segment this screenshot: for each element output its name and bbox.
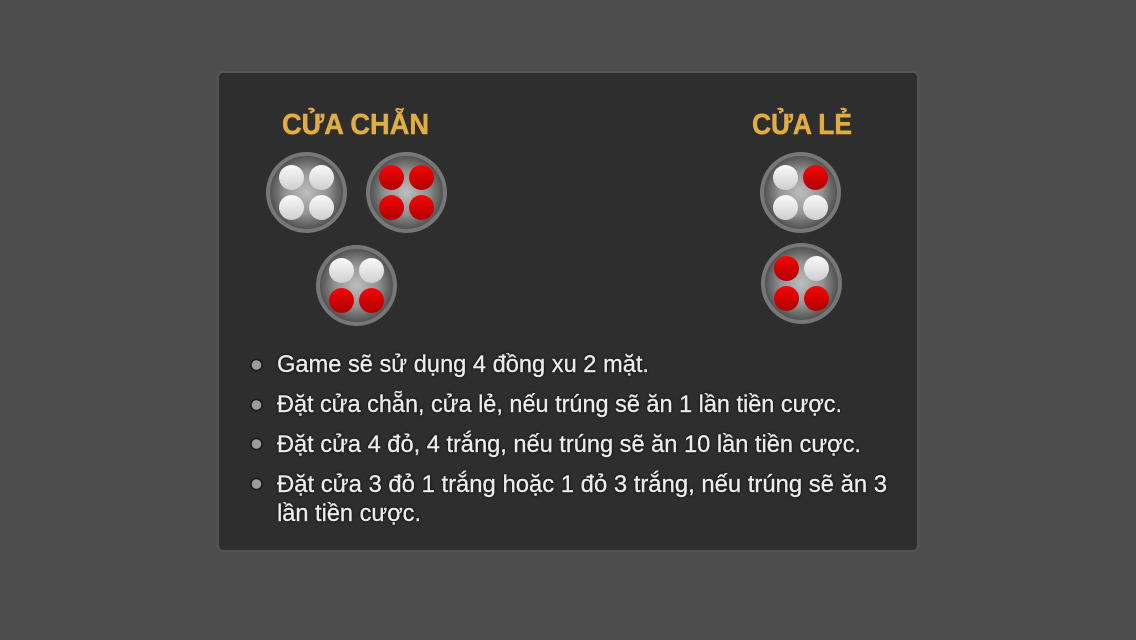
heading: cửa chẵn: CỬA CHẴN [282,106,429,141]
heading: cửa lẻ: CỬA LẺ [752,107,852,141]
rule 4: Đặt cửa 3 đỏ 1 trắng hoặc 1 đỏ 3 trắng, nếu trúng sẽ ăn 3 [277,471,887,498]
rule 4: lần tiền cược. [277,500,421,527]
icon: bowl with 4 white coins [268,154,345,231]
icon: bowl with 4 red coins [368,154,445,231]
rule 4 [250,471,887,527]
icon: bowl with 3 white and 1 red coins [762,154,839,231]
panel: game rules [218,72,918,551]
rule 3: Đặt cửa 4 đỏ, 4 trắng, nếu trúng sẽ ăn 10 lần tiền cược. [277,431,861,458]
icon: bowl with 3 red and 1 white coins [763,245,840,322]
rule 1: Game sẽ sử dụng 4 đồng xu 2 mặt. [277,351,649,378]
icon: bowl with 2 white and 2 red coins [318,247,395,324]
rule 2: Đặt cửa chẵn, cửa lẻ, nếu trúng sẽ ăn 1 lần tiền cược. [277,390,842,418]
